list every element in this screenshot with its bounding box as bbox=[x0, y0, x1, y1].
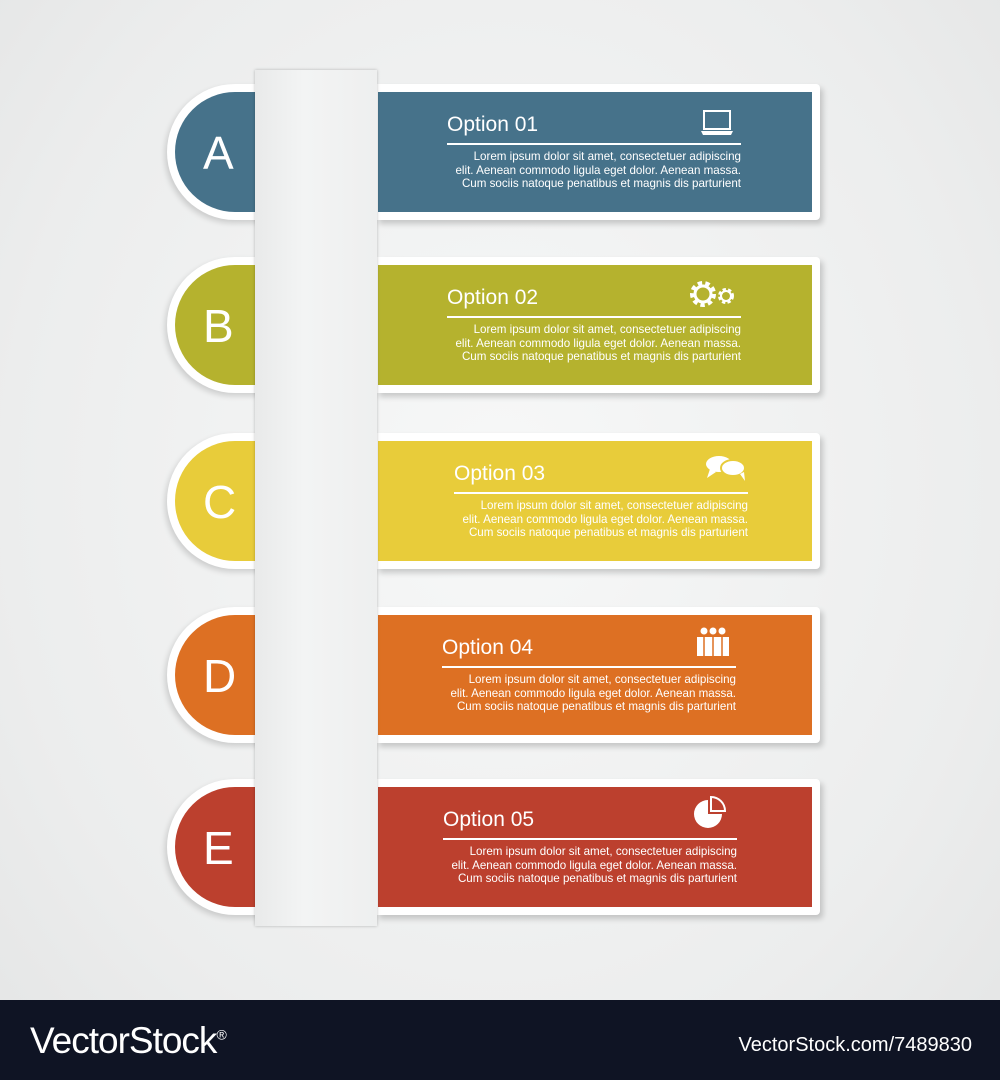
text C: Lorem ipsum dolor sit amet, consectetuer adipiscing bbox=[481, 499, 748, 512]
tab C bbox=[167, 433, 277, 569]
white vertical strip bbox=[255, 70, 377, 926]
text B: Option 02 bbox=[447, 286, 538, 309]
icon: people bbox=[697, 628, 729, 656]
text A: Option 01 bbox=[447, 113, 538, 136]
text E: Option 05 bbox=[443, 808, 534, 831]
icon: gears bbox=[690, 281, 734, 307]
icon: laptop bbox=[701, 110, 733, 135]
text C: Option 03 bbox=[454, 462, 545, 485]
row B bbox=[163, 257, 826, 400]
footer url: VectorStock.com/7489830 bbox=[739, 1034, 972, 1056]
text B bbox=[447, 281, 741, 363]
tab E: E bbox=[203, 822, 234, 874]
text D bbox=[442, 628, 736, 713]
footer bbox=[0, 1000, 1000, 1080]
text B: elit. Aenean commodo ligula eget dolor. Aenean massa. bbox=[455, 336, 741, 350]
text D: Option 04 bbox=[442, 636, 533, 659]
tab D: D bbox=[203, 650, 236, 702]
card C bbox=[376, 433, 820, 569]
card E bbox=[376, 779, 820, 915]
row A bbox=[163, 84, 826, 226]
icon: pie chart bbox=[694, 796, 726, 828]
text E: Lorem ipsum dolor sit amet, consectetuer adipiscing bbox=[470, 845, 737, 858]
text A: Lorem ipsum dolor sit amet, consectetuer adipiscing bbox=[474, 150, 741, 163]
tab E bbox=[167, 779, 277, 915]
text D: Lorem ipsum dolor sit amet, consectetuer adipiscing bbox=[469, 673, 736, 686]
card B bbox=[376, 257, 820, 393]
text E: elit. Aenean commodo ligula eget dolor. Aenean massa. bbox=[451, 858, 737, 872]
text A: elit. Aenean commodo ligula eget dolor. Aenean massa. bbox=[455, 164, 741, 176]
footer logo: VectorStock® bbox=[30, 1020, 226, 1061]
tab B bbox=[167, 257, 277, 393]
row C bbox=[163, 433, 826, 576]
tab B: B bbox=[203, 300, 234, 352]
text C: elit. Aenean commodo ligula eget dolor. Aenean massa. bbox=[462, 512, 748, 526]
tab C: C bbox=[203, 476, 236, 528]
tab D bbox=[167, 607, 277, 743]
text E: Cum sociis natoque penatibus et magnis dis parturient bbox=[458, 872, 737, 885]
icon: speech bubbles bbox=[706, 456, 745, 481]
card D bbox=[376, 607, 820, 743]
row E bbox=[163, 779, 826, 922]
text E bbox=[443, 796, 737, 885]
text B: Lorem ipsum dolor sit amet, consectetuer adipiscing bbox=[474, 323, 741, 336]
text D: elit. Aenean commodo ligula eget dolor. Aenean massa. bbox=[450, 686, 736, 700]
text D: Cum sociis natoque penatibus et magnis dis parturient bbox=[457, 700, 736, 713]
text B: Cum sociis natoque penatibus et magnis dis parturient bbox=[462, 350, 741, 363]
row D bbox=[163, 607, 826, 750]
tab A bbox=[167, 84, 277, 220]
tab A: A bbox=[203, 127, 234, 179]
text C bbox=[454, 456, 748, 539]
text A bbox=[447, 110, 741, 190]
card A bbox=[376, 84, 820, 220]
text C: Cum sociis natoque penatibus et magnis dis parturient bbox=[469, 526, 748, 539]
text A: Cum sociis natoque penatibus et magnis dis parturient bbox=[462, 177, 741, 190]
